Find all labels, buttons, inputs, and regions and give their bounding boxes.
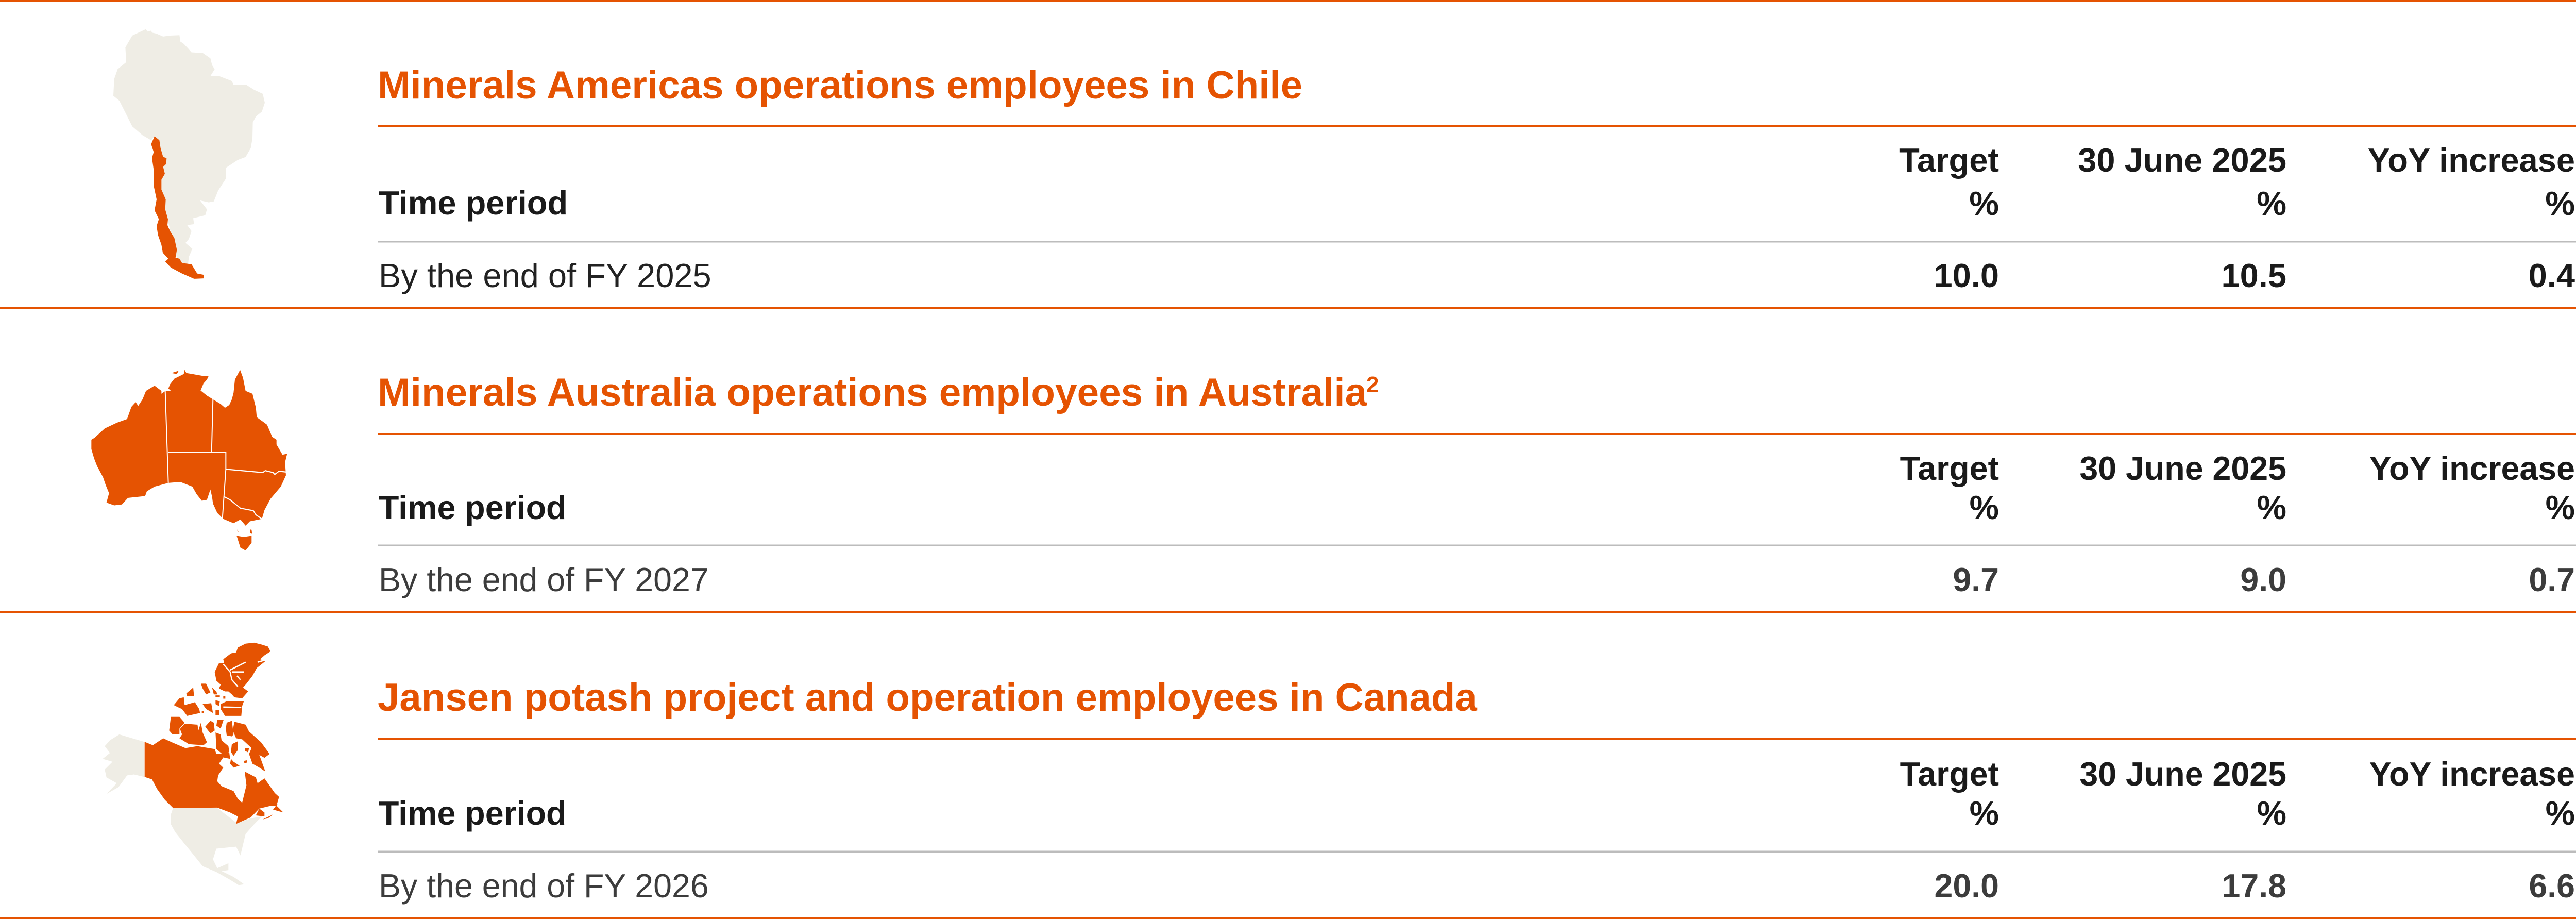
table header: Time period bbox=[379, 795, 566, 832]
table row: 0.4 bbox=[2529, 257, 2575, 294]
table row: 10.0 bbox=[1934, 257, 1999, 294]
table header: % bbox=[1970, 489, 1999, 526]
icon: map of Australia with state borders bbox=[91, 370, 287, 550]
table header: Time period bbox=[379, 184, 568, 222]
panel: Chile bbox=[113, 29, 2576, 294]
table header: % bbox=[2546, 489, 2575, 526]
table row: By the end of FY 2025 bbox=[379, 257, 711, 294]
table header: Target bbox=[1900, 756, 1999, 793]
table header bbox=[379, 450, 2575, 526]
table header: YoY increase bbox=[2369, 756, 2575, 793]
table header: Time period bbox=[379, 489, 566, 526]
heading rule bbox=[378, 125, 2576, 127]
table row bbox=[379, 561, 2575, 598]
table header bbox=[379, 141, 2575, 222]
table row bbox=[379, 257, 2575, 294]
table header: % bbox=[2257, 185, 2286, 222]
icon: map of South America with Chile highlighted bbox=[113, 29, 265, 279]
panel: Australia bbox=[91, 370, 2576, 598]
table row: By the end of FY 2026 bbox=[379, 867, 709, 905]
table header: % bbox=[2257, 795, 2286, 832]
table header: % bbox=[2257, 489, 2286, 526]
table header bbox=[379, 756, 2575, 832]
heading: Minerals Americas operations employees in Chile bbox=[378, 63, 1302, 107]
table row: 9.0 bbox=[2240, 561, 2286, 598]
icon: map of North America with Canada highlighted bbox=[103, 643, 283, 885]
heading: Jansen potash project and operation employees in Canada bbox=[378, 676, 1477, 720]
table row: 0.7 bbox=[2529, 561, 2575, 598]
table header: % bbox=[2546, 795, 2575, 832]
table header: 30 June 2025 bbox=[2078, 141, 2286, 179]
table row: 6.6 bbox=[2529, 867, 2575, 905]
top border rule bbox=[0, 0, 2576, 2]
table header: YoY increase bbox=[2368, 141, 2575, 179]
table row: 10.5 bbox=[2221, 257, 2286, 294]
heading: 2 bbox=[1366, 372, 1379, 397]
table row: By the end of FY 2027 bbox=[379, 561, 709, 598]
table header: Target bbox=[1900, 450, 1999, 487]
table header: % bbox=[2545, 185, 2575, 222]
table header: % bbox=[1970, 795, 1999, 832]
heading rule bbox=[378, 738, 2576, 740]
panel: Canada bbox=[103, 643, 2576, 905]
table row: 9.7 bbox=[1953, 561, 1999, 598]
table header: YoY increase bbox=[2369, 450, 2575, 487]
table header: 30 June 2025 bbox=[2079, 756, 2286, 793]
table row bbox=[379, 867, 2575, 905]
heading: Minerals Australia operations employees in Australia bbox=[378, 371, 1368, 414]
table header: % bbox=[1969, 185, 1999, 222]
table row: 20.0 bbox=[1934, 867, 1999, 905]
table row: 17.8 bbox=[2222, 867, 2286, 905]
table header: 30 June 2025 bbox=[2079, 450, 2286, 487]
heading rule bbox=[378, 433, 2576, 435]
table header: Target bbox=[1899, 141, 1999, 179]
